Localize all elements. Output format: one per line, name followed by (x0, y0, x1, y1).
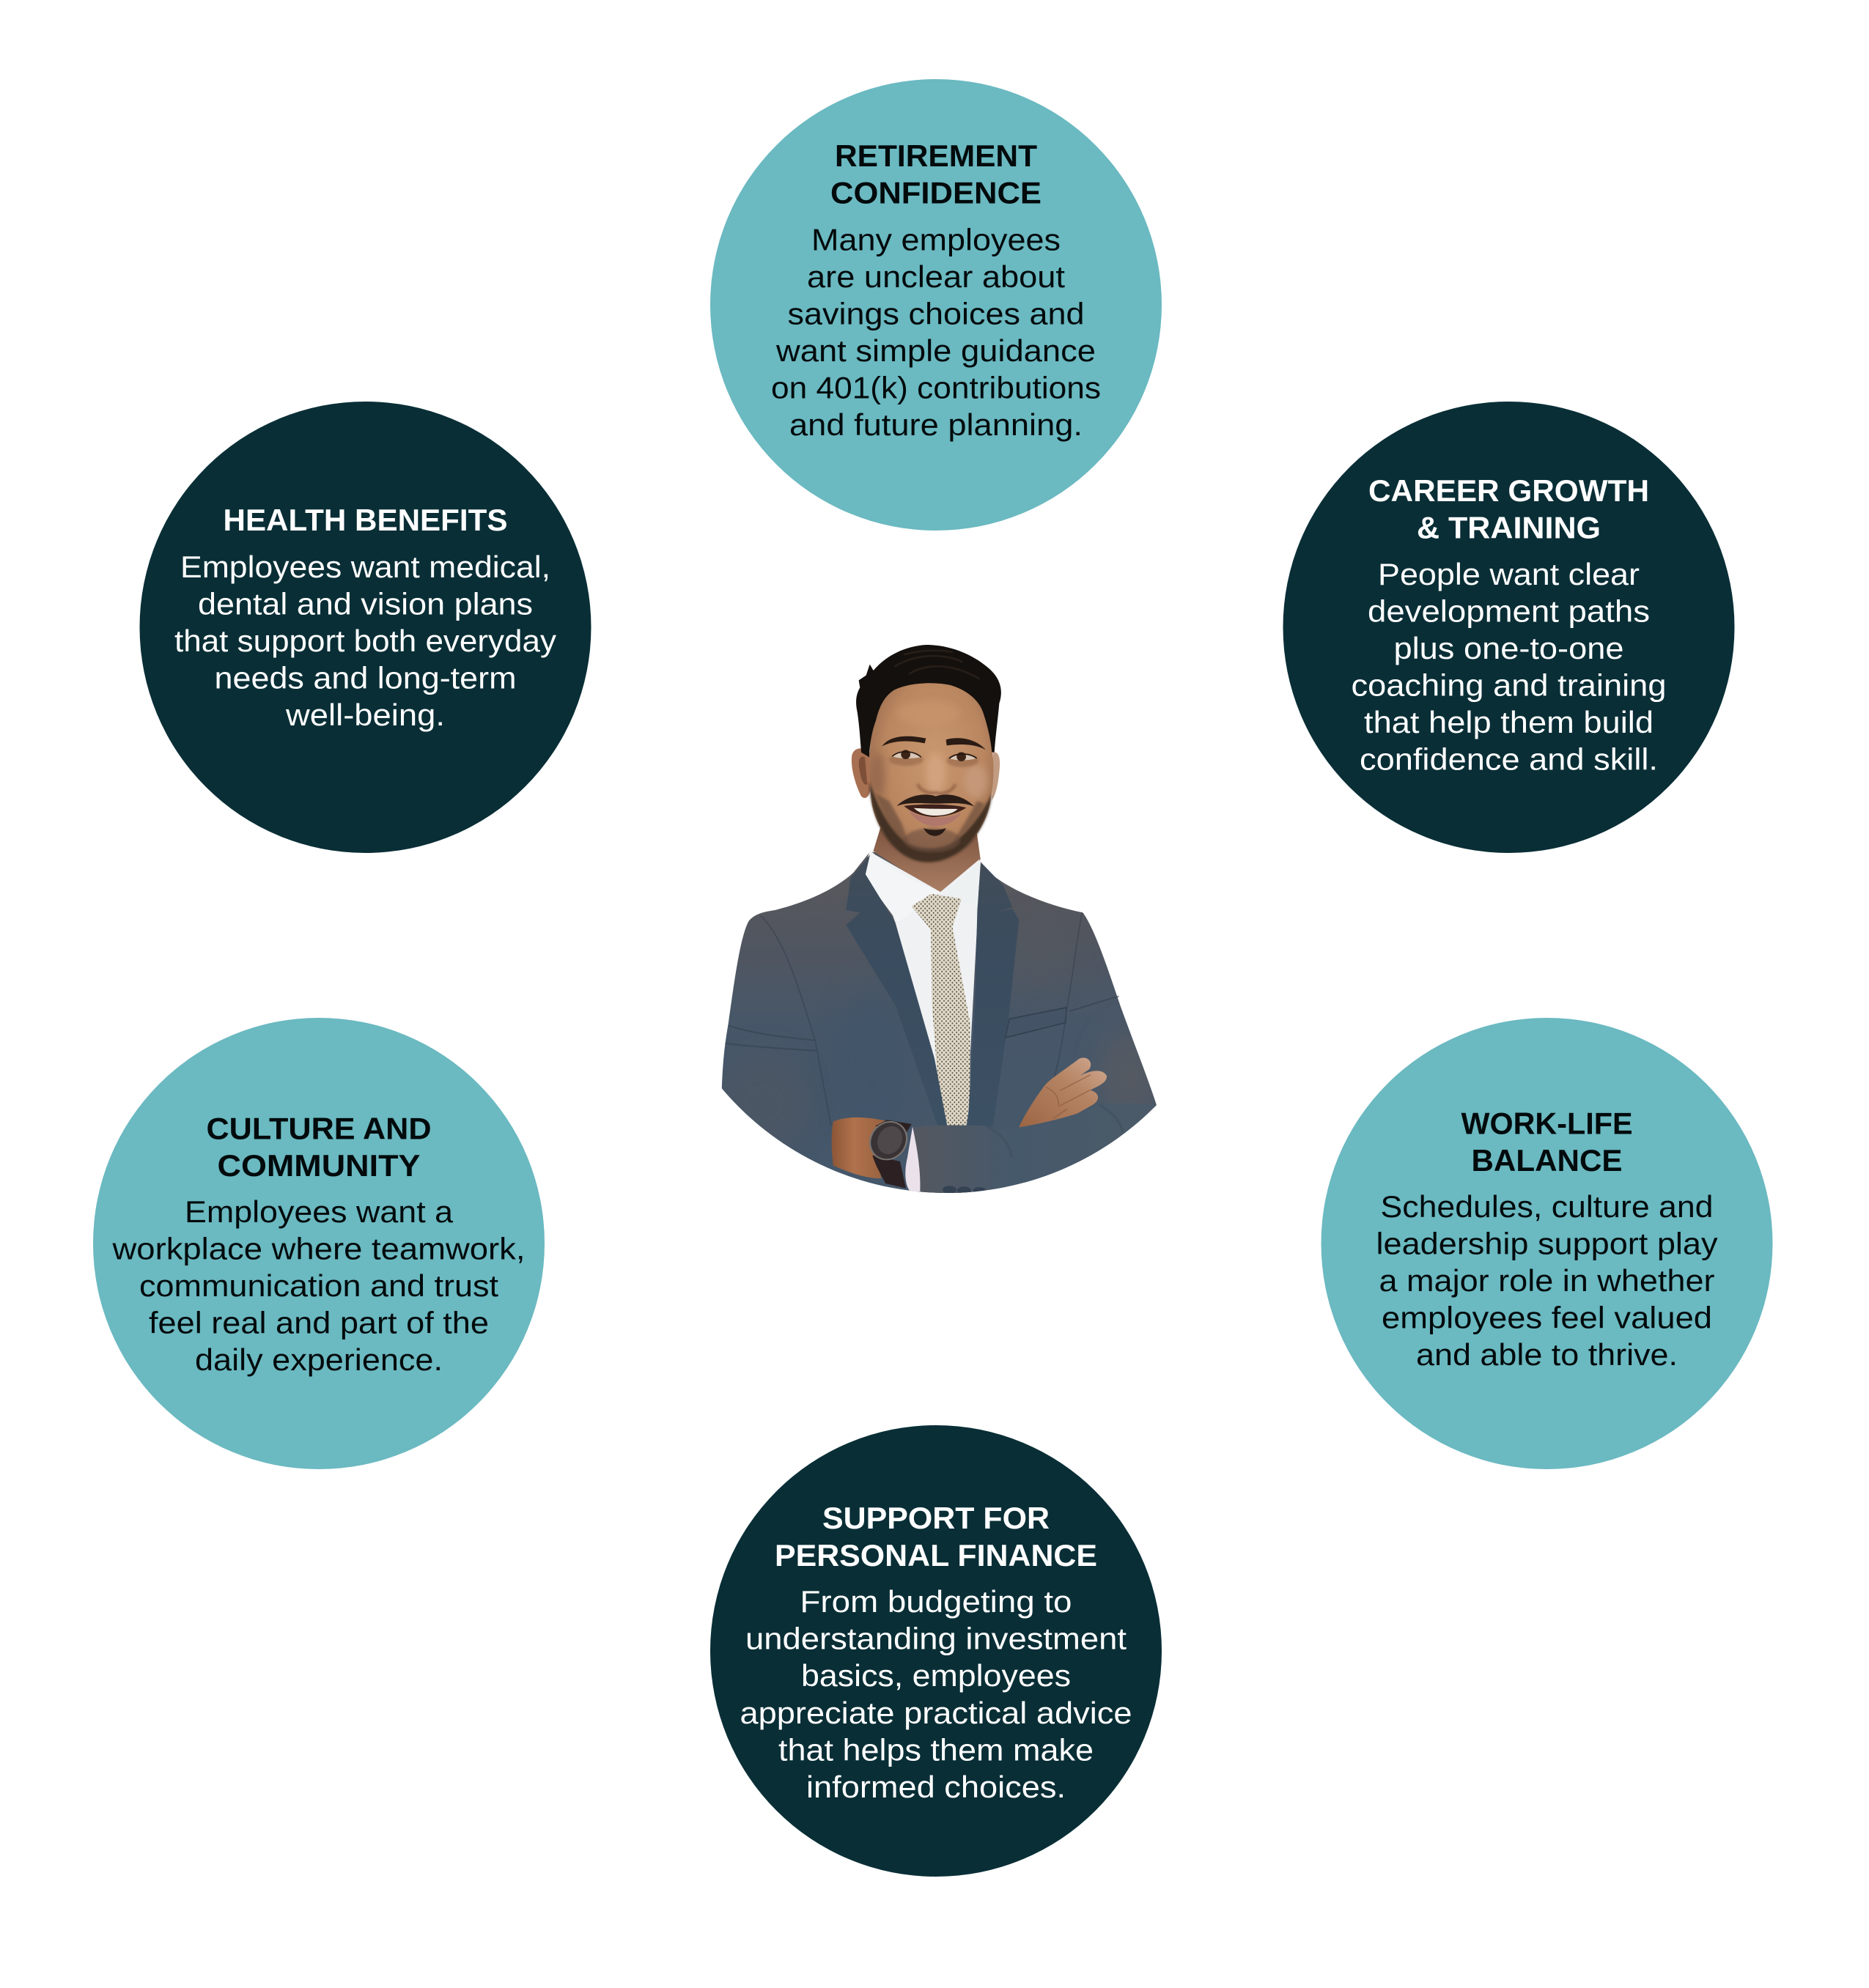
text: personal finance description: From budgeting to (800, 1584, 1072, 1619)
eyebrows (882, 736, 986, 750)
text: culture and community description: communication and trust (139, 1268, 498, 1303)
text: work-life balance description: Schedules, culture and (1381, 1189, 1714, 1224)
panel: support for personal finance (710, 1425, 1162, 1877)
text: career growth description: confidence and skill. (1360, 742, 1658, 777)
heading: culture and community (207, 1111, 431, 1183)
shirt cuff (905, 1126, 921, 1191)
cheek stubble (876, 794, 984, 844)
text: career growth description: coaching and training (1352, 668, 1667, 702)
text: health benefits description: that support both everyday (174, 624, 556, 658)
text: work-life balance description: employees feel valued (1382, 1300, 1712, 1335)
text: career growth description: People want clear (1378, 557, 1640, 591)
left lapel (846, 854, 948, 1130)
text: health benefits description: well-being. (285, 698, 445, 732)
text: retirement confidence description: want simple guidance (775, 333, 1096, 368)
eyes (892, 750, 977, 761)
suit jacket body (721, 851, 1157, 1193)
heading: retirement confidence (830, 138, 1042, 210)
text: retirement confidence description: savings choices and (787, 296, 1085, 331)
jacket shading (718, 920, 1162, 1152)
heading: work-life balance: BALANCE (1472, 1143, 1623, 1178)
panel: retirement confidence (710, 79, 1162, 531)
text: health benefits description: needs and long-term (214, 661, 516, 695)
face (870, 670, 993, 862)
text: retirement confidence description (771, 223, 1101, 442)
text: work-life balance description: and able to thrive. (1416, 1337, 1678, 1372)
text: health benefits description (174, 550, 556, 732)
text: retirement confidence description: on 401(k) contributions (771, 371, 1101, 404)
text: culture and community description: daily experience. (195, 1342, 443, 1377)
lower lip (909, 810, 962, 826)
chin stubble (904, 828, 960, 852)
hair highlights (894, 651, 980, 679)
beard (869, 782, 992, 862)
text: culture and community description: feel real and part of the (149, 1306, 489, 1340)
mouth (904, 805, 966, 817)
illustration: smiling businessman with crossed arms (721, 645, 1157, 1193)
panel: work-life balance (1321, 1018, 1772, 1469)
text: health benefits description: dental and vision plans (198, 586, 533, 621)
heading: support for personal finance: SUPPORT FOR (822, 1501, 1050, 1535)
text: personal finance description: appreciate practical advice (740, 1696, 1132, 1730)
text: career growth description: plus one-to-one (1394, 631, 1624, 665)
heading: career growth and training (1368, 473, 1649, 545)
text: work-life balance description (1376, 1189, 1718, 1372)
heading: work-life balance (1461, 1106, 1633, 1178)
jacket buttons (943, 1186, 986, 1193)
arms and hands (832, 1058, 1159, 1207)
heading: career growth and training: CAREER GROWTH (1368, 473, 1649, 508)
text: culture and community description: Employees want a (185, 1194, 454, 1229)
tie (911, 894, 970, 1128)
teeth (914, 808, 958, 816)
heading: career growth and training: & TRAINING (1417, 510, 1601, 545)
text: retirement confidence description: Many employees (811, 223, 1061, 256)
wristwatch (866, 1118, 912, 1189)
text: personal finance description: basics, employees (801, 1658, 1071, 1693)
heading: culture and community: CULTURE AND (207, 1111, 431, 1146)
torso (721, 827, 1157, 1193)
hair (856, 645, 1001, 757)
neck (873, 825, 981, 895)
text: personal finance description: that helps them make (778, 1732, 1094, 1767)
text: personal finance description: informed choices. (806, 1770, 1066, 1804)
text: personal finance description (740, 1584, 1132, 1804)
heading: retirement confidence: CONFIDENCE (830, 176, 1042, 210)
shirt collar (865, 850, 981, 916)
sleeve folds (987, 1104, 1123, 1158)
text: career growth description (1352, 557, 1667, 777)
heading: work-life balance: WORK-LIFE (1461, 1106, 1633, 1140)
panel: health benefits (139, 402, 591, 853)
text: personal finance description: understanding investment (745, 1621, 1127, 1656)
text: work-life balance description: a major role in whether (1379, 1263, 1715, 1298)
ears (852, 748, 1000, 800)
facial lighting (871, 701, 988, 799)
panel: career growth and training (1283, 402, 1734, 853)
text: career growth description: that help them build (1364, 705, 1654, 739)
heading: retirement confidence: RETIREMENT (835, 138, 1037, 173)
jacket seams (725, 912, 1118, 1126)
moustache (896, 794, 974, 807)
text: retirement confidence description: and future planning. (789, 407, 1083, 442)
breast pocket (1006, 1008, 1066, 1038)
text: culture and community description: workplace where teamwork, (111, 1231, 526, 1266)
crossing sleeve (913, 1104, 1157, 1193)
panel: culture and community (93, 1018, 545, 1469)
text: career growth description: development paths (1368, 594, 1650, 629)
text: culture and community description (111, 1194, 526, 1377)
shirt (870, 851, 979, 1074)
hand with folded fingers (1020, 1058, 1107, 1128)
heading: support for personal finance (775, 1501, 1097, 1573)
text: health benefits description: Employees want medical, (180, 550, 550, 584)
text: retirement confidence description: are unclear about (807, 259, 1065, 294)
heading: culture and community: COMMUNITY (217, 1148, 421, 1183)
right lapel (967, 862, 1019, 1130)
head (852, 645, 1001, 862)
forearm (832, 1117, 887, 1178)
heading: support for personal finance: PERSONAL FINANCE (775, 1538, 1097, 1573)
heading: health benefits: HEALTH BENEFITS (223, 503, 507, 537)
text: work-life balance description: leadership support play (1376, 1227, 1718, 1260)
soul patch (924, 828, 946, 836)
